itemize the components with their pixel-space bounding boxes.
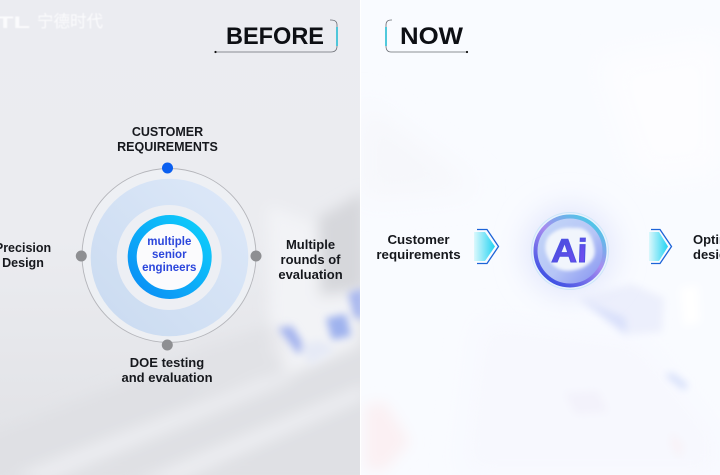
panel: now background [364, 130, 697, 471]
blue gradient ring [132, 220, 207, 294]
node: left [76, 250, 87, 262]
heading frame: now [386, 20, 468, 53]
cycle diagram [76, 162, 262, 350]
center text: engineers [142, 262, 196, 274]
light blue disc [91, 179, 248, 336]
outer ring [82, 168, 256, 342]
label: multiple rounds of evaluation: rounds of [281, 252, 341, 267]
center text: senior [152, 249, 187, 261]
logo [0, 12, 104, 32]
ai letters: Ai [551, 232, 588, 269]
label: customer requirements now: requirements [376, 247, 461, 262]
heading frame: before [214, 20, 337, 53]
arrow: output [649, 230, 672, 264]
label: doe testing: and evaluation [121, 370, 213, 385]
heading: now [386, 20, 468, 53]
label: customer requirements now: Customer [387, 232, 450, 247]
arrow: input [474, 230, 498, 264]
heading: now: NOW [400, 23, 463, 50]
label: precision design: Design [2, 256, 44, 270]
panel: before background [0, 0, 380, 475]
label: doe testing: DOE testing [130, 355, 204, 370]
label: multiple rounds of evaluation: Multiple [286, 237, 335, 252]
heading: before: BEFORE [226, 23, 324, 50]
node: bottom [162, 340, 173, 350]
heading: before [214, 20, 337, 53]
label: customer requirements top: REQUIREMENTS [117, 140, 218, 154]
node: top [162, 162, 173, 174]
icon: ai orb [524, 205, 616, 297]
label: multiple rounds of evaluation: evaluation [278, 267, 343, 282]
pale inner disc [117, 205, 222, 310]
center text: multiple [147, 236, 191, 248]
node: right [250, 250, 262, 262]
logo: 宁德时代 [37, 12, 104, 31]
label: customer requirements top: CUSTOMER [132, 125, 203, 139]
